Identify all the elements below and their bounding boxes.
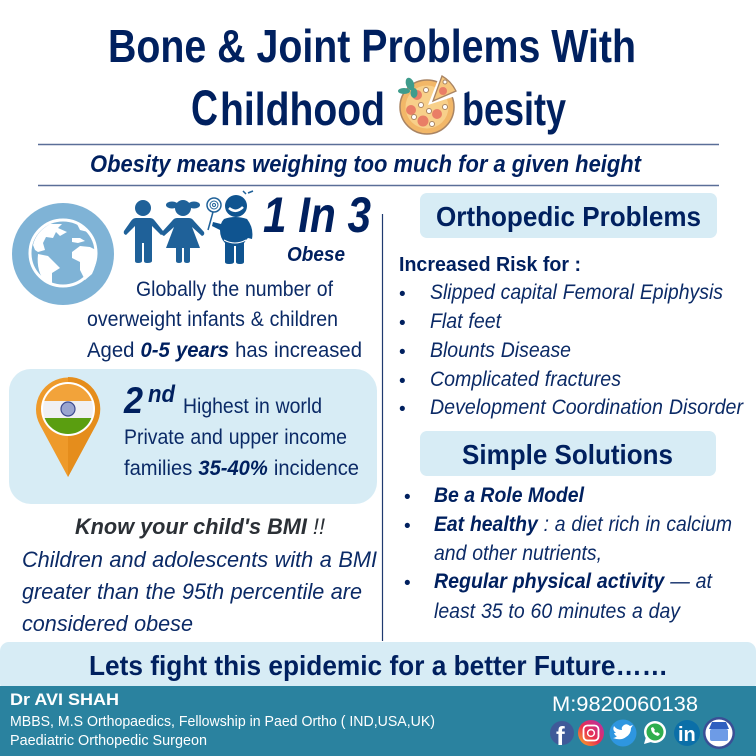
footer	[0, 686, 756, 756]
list: orthopedic problems: Complicated fractures	[430, 368, 621, 391]
title: Bone & Joint Problems With	[108, 20, 636, 72]
text: 2nd highest: Private and upper income	[124, 426, 347, 449]
panel: Orthopedic Problems heading	[420, 193, 717, 238]
list: solutions: •	[404, 516, 411, 537]
label: Increased Risk for: Increased Risk for :	[399, 254, 581, 276]
heading: Know your child's BMI: Know your child's BMI !!	[75, 514, 325, 539]
list: orthopedic problems: Development Coordination Disorder	[430, 396, 744, 419]
list: solutions: Eat healthy : a diet rich in calcium	[434, 513, 732, 536]
icons: social media	[550, 717, 735, 751]
list: solutions: least 35 to 60 minutes a day	[434, 600, 681, 623]
text: global statistic: Aged 0-5 years has increased	[87, 339, 362, 362]
icons: social media: in	[678, 724, 696, 746]
list: solutions: Regular physical activity — at	[434, 570, 713, 593]
text: 2nd highest: Highest in world	[183, 395, 322, 418]
title: C	[191, 80, 218, 136]
list: solutions: •	[404, 487, 411, 508]
text: global statistic: overweight infants & children	[87, 308, 338, 331]
phone number: M:9820060138	[552, 693, 698, 716]
list: orthopedic problems: •	[399, 342, 406, 363]
icon: girl	[162, 200, 204, 263]
list: orthopedic problems: •	[399, 371, 406, 392]
banner: call to action	[0, 642, 756, 692]
list: orthopedic problems: Flat feet	[430, 310, 502, 333]
text: BMI definition: Children and adolescents with a BMI	[22, 547, 377, 572]
icon: obese child with lollipop	[207, 191, 253, 264]
heading: 1 In 3: 1 In 3	[263, 187, 371, 243]
text: 2nd highest: nd	[148, 381, 176, 408]
text: global statistic	[87, 278, 362, 362]
icon: globe	[12, 203, 114, 305]
text: BMI definition	[22, 547, 377, 636]
doctor details: Dr AVI SHAH	[10, 690, 119, 709]
text: global statistic: Globally the number of	[136, 278, 333, 301]
title: hildhood	[220, 83, 385, 135]
text: BMI definition: greater than the 95th percentile are	[22, 579, 362, 604]
icon: India map pin	[36, 377, 100, 477]
subtitle: Obesity means weighing too much for a given height	[90, 151, 642, 178]
list: orthopedic problems	[399, 281, 744, 420]
icon: pizza	[398, 72, 468, 134]
icons: social media: f	[556, 721, 565, 751]
title: besity	[462, 83, 566, 135]
list: solutions	[404, 484, 732, 623]
panel: India statistic	[9, 369, 377, 504]
doctor details: MBBS, M.S Orthopaedics, Fellowship in Paed Ortho ( IND,USA,UK)	[10, 713, 435, 730]
list: orthopedic problems: •	[399, 399, 406, 420]
list: solutions: Be a Role Model	[434, 484, 585, 507]
panel: Orthopedic Problems heading: Orthopedic Problems	[436, 201, 701, 232]
title	[108, 20, 636, 136]
list: solutions: and other nutrients,	[434, 542, 602, 565]
label: Obese: Obese	[287, 244, 345, 266]
list: orthopedic problems: •	[399, 284, 406, 305]
text: 2nd highest: 2	[123, 380, 143, 421]
list: orthopedic problems: Blounts Disease	[430, 339, 571, 362]
doctor details: Paediatric Orthopedic Surgeon	[10, 732, 207, 749]
text: BMI definition: considered obese	[22, 611, 193, 636]
doctor details	[10, 690, 435, 749]
list: orthopedic problems: Slipped capital Femoral Epiphysis	[430, 281, 723, 304]
panel: Simple Solutions heading	[420, 431, 716, 476]
text: 2nd highest	[123, 380, 359, 480]
list: orthopedic problems: •	[399, 313, 406, 334]
text: 2nd highest: families 35-40% incidence	[124, 457, 359, 480]
list: solutions: •	[404, 573, 411, 594]
icon: boy	[124, 200, 163, 263]
banner: call to action: Lets fight this epidemic for a better Future……	[89, 650, 668, 681]
panel: Simple Solutions heading: Simple Solutions	[462, 439, 673, 470]
